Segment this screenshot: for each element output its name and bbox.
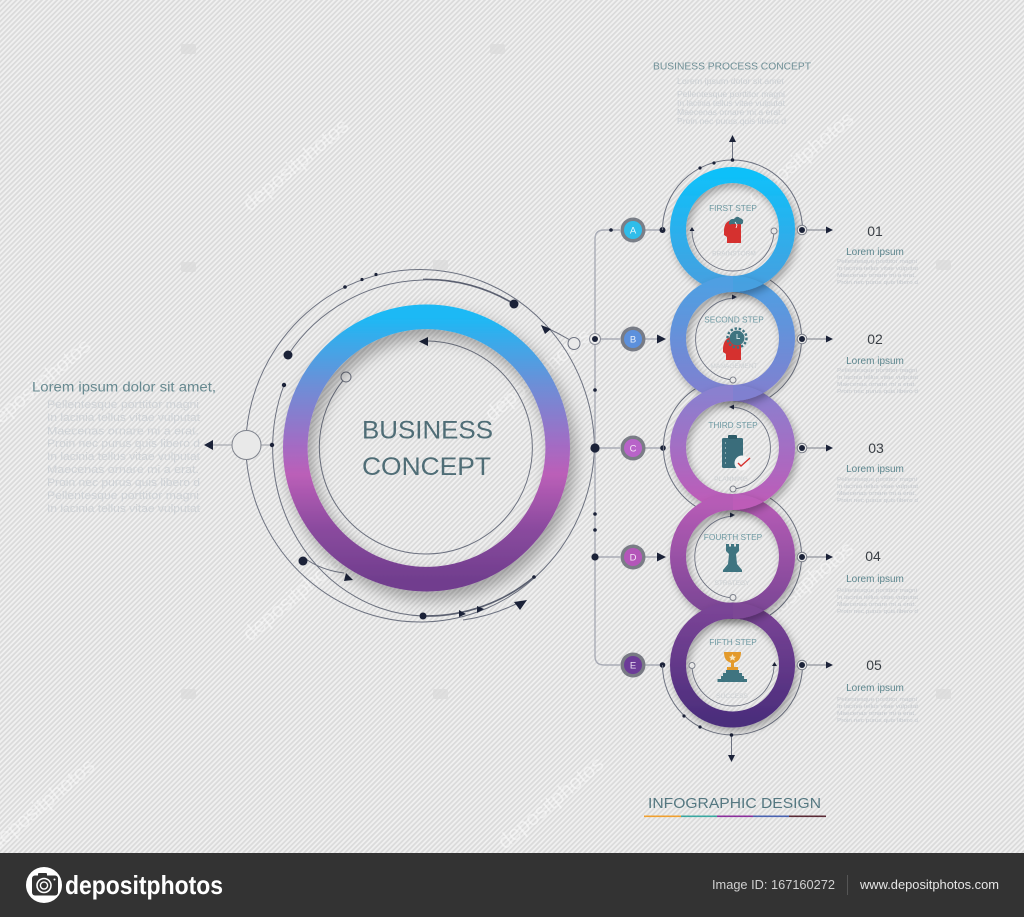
step sub labels: STRATEGY	[714, 580, 750, 587]
step descriptions: Maecenas ornare mi a erat.	[837, 711, 916, 717]
left text block: Pellentesque porttitor magni	[47, 490, 199, 502]
top heading block: Maecenas ornare mi a erat.	[677, 108, 783, 117]
step ring 3	[678, 393, 787, 502]
stock watermarks: depositphotos	[493, 752, 608, 854]
footer bar	[0, 853, 1024, 917]
step numbers: 03	[868, 440, 884, 456]
step descriptions: Maecenas ornare mi a erat.	[837, 602, 916, 608]
step captions: Lorem ipsum	[846, 464, 904, 475]
step descriptions: Proin nec purus quis libero d	[837, 280, 918, 286]
step captions: Lorem ipsum	[846, 574, 904, 585]
left text block: Lorem ipsum dolor sit amet,	[32, 380, 216, 394]
site url: www.depositphotos.com	[859, 878, 999, 892]
faint watermark camera marks	[181, 44, 951, 699]
left orbit nodes and arrows	[204, 273, 551, 620]
stock watermarks: depositphotos	[743, 107, 858, 209]
left text block: In lacinia tellus vitae vulputat	[47, 451, 200, 463]
logo wordmark: depositphotos	[65, 870, 223, 900]
step numbers: 02	[867, 331, 883, 347]
badge E: E	[630, 660, 636, 672]
left text block: In lacinia tellus vitae vulputat	[47, 503, 200, 515]
main ring title: CONCEPT	[362, 453, 491, 481]
top heading block	[653, 62, 811, 126]
badge D	[620, 544, 646, 570]
step sub labels	[710, 250, 758, 700]
step ring 2	[678, 284, 787, 393]
right arrows	[797, 225, 833, 670]
step ring 5	[678, 610, 787, 720]
step descriptions: Proin nec purus quis libero d	[837, 718, 918, 724]
step descriptions: In lacinia tellus vitae vulputat	[837, 595, 919, 601]
step labels	[704, 203, 764, 647]
stock watermarks: depositphotos	[480, 324, 595, 426]
badge C: C	[630, 444, 637, 454]
badge B	[620, 326, 646, 352]
left text block: Maecenas ornare mi a erat.	[47, 426, 199, 438]
badge A: A	[630, 226, 637, 236]
step labels: FIRST STEP	[709, 203, 757, 213]
badge B: B	[630, 334, 636, 346]
outer thin arcs around step rings	[662, 142, 802, 755]
top heading block: In lacinia tellus vitae vulputat	[677, 99, 786, 108]
step labels: FIFTH STEP	[709, 637, 757, 647]
image id: Image ID: 167160272	[712, 878, 835, 892]
icon: chess rook	[723, 544, 742, 572]
icon: clipboard with check	[722, 435, 750, 470]
step descriptions: Pellentesque porttitor magni	[837, 368, 917, 374]
left text block: In lacinia tellus vitae vulputat	[47, 412, 200, 424]
left text block: Maecenas ornare mi a erat.	[47, 464, 199, 476]
step numbers	[865, 223, 884, 673]
badge E	[620, 652, 646, 678]
top heading block: Lorem ipsum dolor sit amet	[677, 77, 785, 86]
icon: head with gear	[723, 328, 746, 360]
top heading block: BUSINESS PROCESS CONCEPT	[653, 62, 811, 72]
top heading block: Proin nec purus quis libero d	[677, 117, 786, 126]
step labels: SECOND STEP	[704, 314, 764, 324]
step captions: Lorem ipsum	[846, 683, 904, 694]
left text block: Proin nec purus quis libero d	[47, 438, 200, 450]
step descriptions: Proin nec purus quis libero d	[837, 609, 918, 615]
step descriptions: Proin nec purus quis libero d	[837, 389, 918, 395]
step numbers: 05	[866, 657, 882, 673]
ring interlocks	[733, 276, 771, 624]
connector nodes	[590, 227, 666, 668]
main ring title: BUSINESS	[362, 416, 493, 444]
step labels: FOURTH STEP	[704, 532, 763, 542]
outer orbit	[246, 270, 594, 622]
step descriptions: In lacinia tellus vitae vulputat	[837, 375, 919, 381]
step descriptions: Maecenas ornare mi a erat.	[837, 382, 916, 388]
step sub labels: SUCCESS	[716, 693, 749, 700]
small open nodes on left orbit	[232, 338, 580, 460]
top and bottom arrows	[682, 135, 736, 762]
infographic design heading: INFOGRAPHIC DESIGN	[648, 795, 821, 812]
step descriptions: Pellentesque porttitor magni	[837, 477, 917, 483]
stock watermarks: depositphotos	[743, 537, 858, 639]
step captions: Lorem ipsum	[846, 247, 904, 258]
logo mark	[26, 867, 62, 903]
step ring 4	[678, 502, 787, 611]
icon: trophy on podium	[718, 652, 747, 682]
icon: head with cloud	[724, 217, 743, 243]
step descriptions: In lacinia tellus vitae vulputat	[837, 266, 919, 272]
stock watermarks	[0, 107, 858, 856]
left orbit lines	[213, 270, 594, 622]
badge C	[620, 436, 646, 460]
step descriptions: Pellentesque porttitor magni	[837, 588, 917, 594]
connector trunk	[595, 230, 663, 665]
inner thin arcs	[692, 230, 774, 706]
top heading block: Pellentesque porttitor magni	[677, 90, 785, 99]
step descriptions	[837, 259, 919, 724]
step descriptions: In lacinia tellus vitae vulputat	[837, 484, 919, 490]
step labels: THIRD STEP	[708, 420, 758, 430]
step captions	[846, 247, 904, 694]
inner arc markers	[689, 227, 777, 668]
badge D: D	[630, 552, 637, 564]
step sub labels: PLANNING	[714, 476, 748, 483]
step descriptions: Maecenas ornare mi a erat.	[837, 491, 916, 497]
left text block: Proin nec purus quis libero d	[47, 477, 200, 489]
stock watermarks: depositphotos	[238, 544, 353, 646]
step numbers: 01	[867, 223, 883, 239]
main ring	[295, 317, 558, 579]
left text block	[32, 380, 216, 515]
left text block: Pellentesque porttitor magni	[47, 399, 199, 411]
multicolour rule	[644, 816, 826, 817]
main ring title	[362, 416, 493, 481]
step descriptions: Pellentesque porttitor magni	[837, 697, 917, 703]
step ring 1	[678, 175, 787, 284]
stock watermarks: depositphotos	[238, 114, 353, 216]
step sub labels: MANAGEMENT	[710, 363, 758, 370]
step descriptions: Proin nec purus quis libero d	[837, 498, 918, 504]
step numbers: 04	[865, 548, 881, 564]
step captions: Lorem ipsum	[846, 356, 904, 367]
badge A	[620, 218, 646, 242]
step descriptions: In lacinia tellus vitae vulputat	[837, 704, 919, 710]
step descriptions: Pellentesque porttitor magni	[837, 259, 917, 265]
step descriptions: Maecenas ornare mi a erat.	[837, 273, 916, 279]
step sub labels: BRAINSTORM	[712, 250, 756, 258]
